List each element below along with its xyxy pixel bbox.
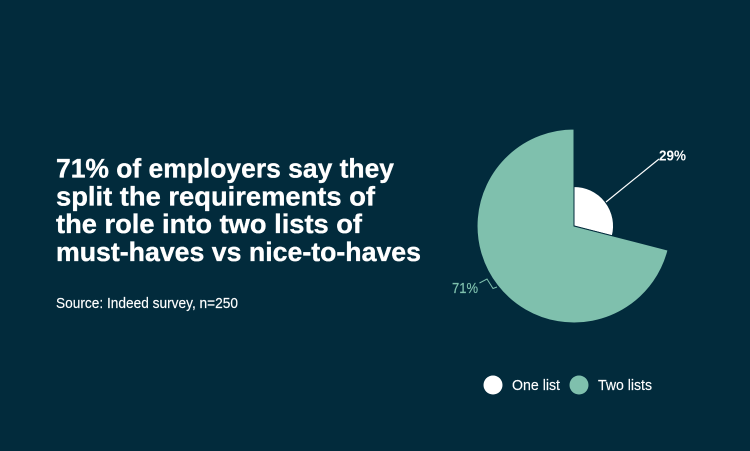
legend xyxy=(484,376,652,394)
title: split the requirements of xyxy=(56,181,375,211)
title: the role into two lists of xyxy=(56,209,362,239)
slice: two lists 71% xyxy=(477,129,668,323)
legend item: two lists xyxy=(570,376,652,394)
leader line: 29% xyxy=(606,159,659,202)
slice: one list 29% xyxy=(574,186,614,236)
pie chart xyxy=(452,129,686,323)
label: 29%: 29% xyxy=(659,148,686,164)
title: must-haves vs nice-to-haves xyxy=(56,237,421,267)
title: 71% of employers say they xyxy=(56,154,394,184)
label: 71%: 71% xyxy=(452,281,478,297)
source note: Source: Indeed survey, n=250 xyxy=(56,295,238,312)
title xyxy=(56,154,421,267)
legend item: two lists: Two lists xyxy=(598,377,652,394)
leader line: 71% xyxy=(480,279,497,288)
legend item: one list: One list xyxy=(512,377,561,394)
legend item: one list xyxy=(484,376,561,394)
